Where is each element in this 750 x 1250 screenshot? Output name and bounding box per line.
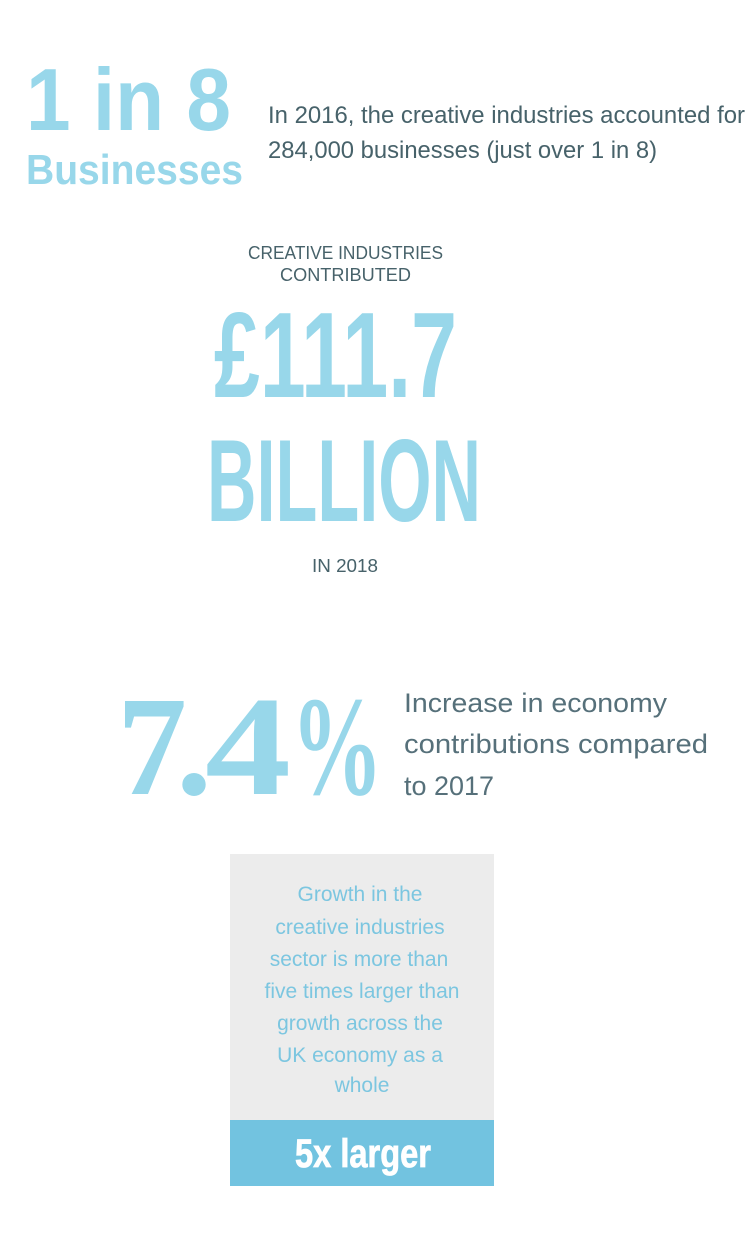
callout text: Growth in the	[298, 883, 422, 906]
text block: economy contributions: Increase in economy	[404, 688, 668, 718]
callout text: growth across the	[277, 1012, 443, 1035]
big figure: £111.7 billion	[207, 287, 481, 546]
text block: economy contributions	[404, 688, 708, 801]
subheading: Businesses: Businesses	[26, 146, 243, 193]
big figure: 7.4%: 7	[117, 667, 187, 825]
big figure: £111.7 billion: £111.7	[214, 287, 457, 423]
big figure: 7.4%: .	[176, 667, 212, 825]
banner: 5x larger: 5x larger	[295, 1132, 431, 1176]
text block: economy contributions: to 2017	[404, 771, 494, 801]
label: creative industries contributed: CREATIVE INDUSTRIES	[248, 243, 443, 263]
callout text: UK economy as a	[277, 1044, 443, 1067]
heading: 1 in 8: 1 in 8	[26, 50, 231, 149]
big figure: £111.7 billion: BILLION	[207, 415, 481, 546]
callout text: creative industries	[275, 916, 445, 939]
callout text: five times larger than	[265, 980, 459, 1003]
text block: businesses description	[268, 102, 745, 164]
callout text: whole	[334, 1074, 389, 1097]
text block: economy contributions: contributions compared	[404, 729, 708, 759]
callout text: sector is more than	[270, 948, 448, 971]
label: creative industries contributed	[248, 243, 443, 285]
big figure: 7.4%: 4	[205, 667, 291, 825]
label: creative industries contributed: CONTRIBUTED	[280, 265, 411, 285]
text block: businesses description: In 2016, the creative industries accounted for	[268, 102, 745, 129]
text block: businesses description: 284,000 businesses (just over 1 in 8)	[268, 137, 657, 164]
panel: growth callout	[230, 854, 494, 1186]
big figure: 7.4%: %	[291, 667, 383, 825]
stat: 1 in 8 businesses	[26, 50, 243, 193]
label: in 2018: IN 2018	[312, 556, 378, 576]
callout text	[265, 883, 459, 1097]
banner: 5x larger	[230, 1120, 494, 1186]
big figure: 7.4%	[117, 667, 383, 825]
panel background	[230, 854, 494, 1120]
